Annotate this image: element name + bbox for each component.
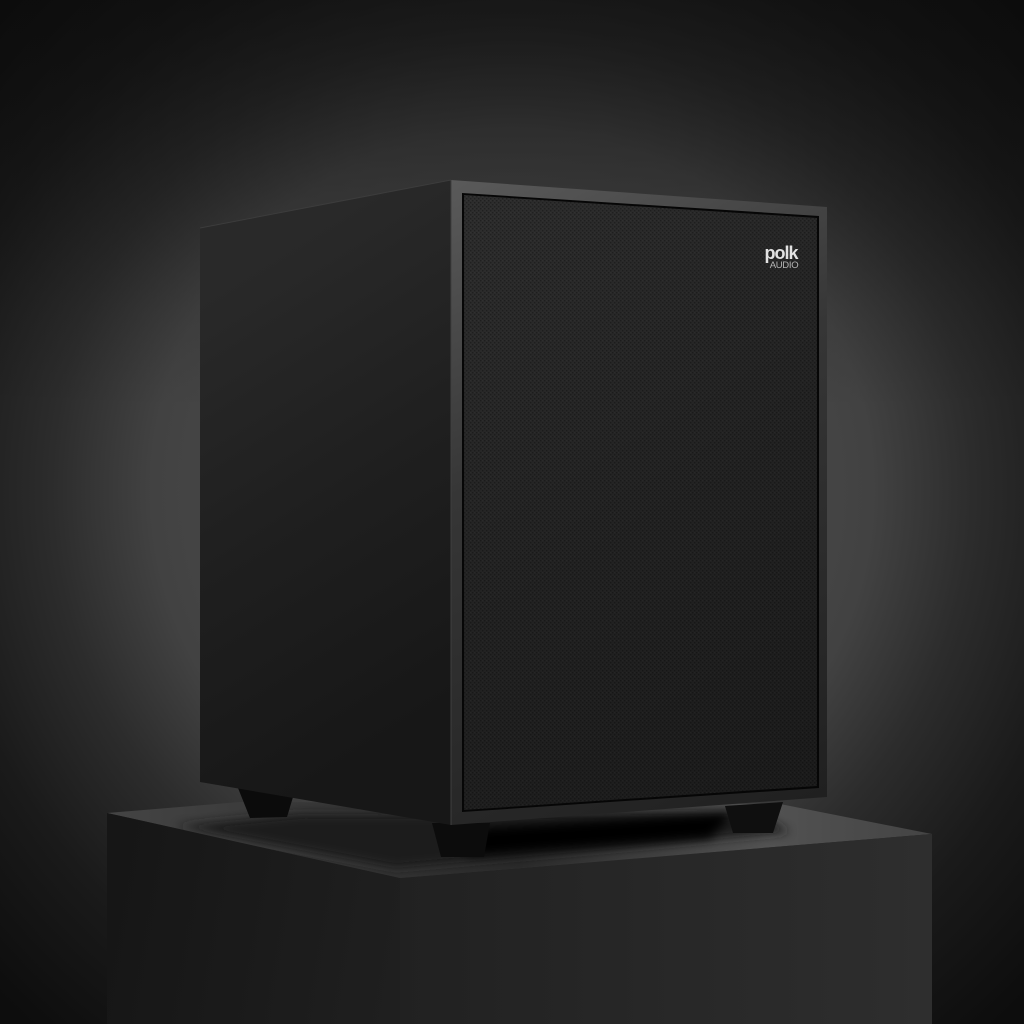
subwoofer cabinet	[200, 180, 827, 825]
cabinet side panel	[200, 180, 451, 825]
logo: Polk Audio	[764, 243, 799, 271]
speaker grille	[464, 195, 817, 810]
grille mesh texture	[464, 195, 817, 810]
front frame	[451, 180, 827, 825]
frame corner edge	[450, 180, 452, 825]
speaker feet	[238, 788, 783, 857]
cabinet top edge highlight	[200, 180, 451, 228]
pedestal top surface	[107, 802, 932, 878]
foot: rear left	[238, 788, 293, 818]
speaker contact shadow	[175, 812, 790, 868]
logo: Polk Audio: AUDIO	[770, 260, 798, 271]
foot: right	[725, 802, 783, 833]
grille recess	[462, 193, 819, 812]
foot: front centre	[432, 823, 490, 857]
pedestal	[107, 802, 932, 1024]
pedestal left face	[107, 813, 400, 1024]
logo: Polk Audio: polk	[764, 243, 799, 263]
pedestal right face	[400, 834, 932, 1024]
